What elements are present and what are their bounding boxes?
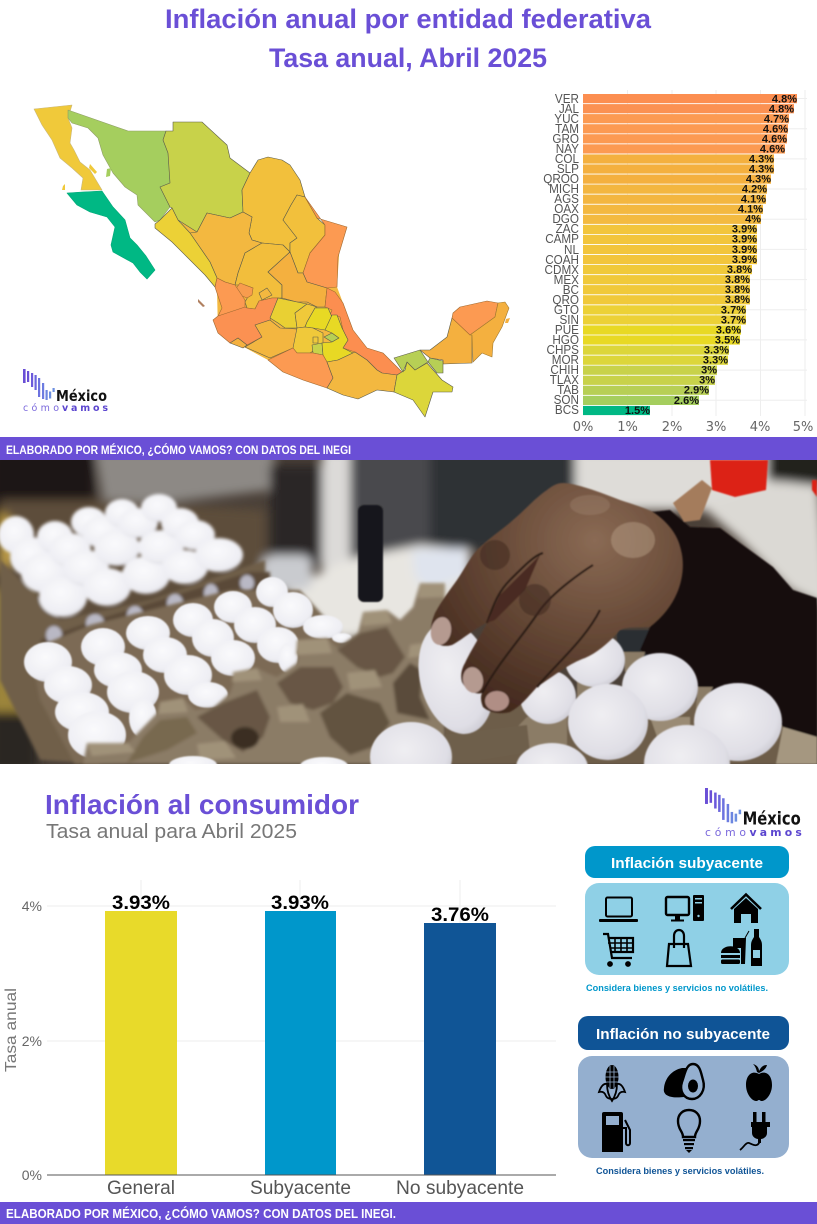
- bar chart: inflation by state: 4.2%: [742, 184, 767, 196]
- icon: shopping cart: [603, 934, 633, 966]
- icon: corn: [599, 1065, 625, 1101]
- bar chart: inflation by state: 4.3%: [749, 164, 774, 176]
- arm and red shirt behind: [673, 460, 817, 522]
- bar chart: inflation by state: TLAX: [550, 372, 579, 387]
- icon: laptop: [599, 898, 638, 922]
- bar chart: consumer inflation: No subyacente: [396, 1178, 524, 1199]
- icon: shopping bag: [667, 930, 691, 966]
- panel: inflación subyacente: Considera bienes y servicios no volátiles.: [586, 983, 768, 994]
- bar chart: consumer inflation: 0%: [22, 1167, 42, 1183]
- bar chart: inflation by state: CHIH: [550, 362, 579, 377]
- logo: México cómo vamos: cómo: [23, 403, 59, 414]
- panel: inflación no subyacente: [578, 1016, 789, 1177]
- bar chart: inflation by state: COL: [555, 152, 579, 166]
- bar chart: consumer inflation: 3.93%: [271, 893, 329, 914]
- bar chart: inflation by state: 4.8%: [769, 104, 794, 116]
- bar chart: inflation by state: 4.6%: [763, 124, 788, 136]
- icon: desktop computer: [666, 895, 704, 922]
- bar chart: inflation by state: 4.3%: [746, 174, 771, 186]
- bar chart: inflation by state: 3.9%: [732, 224, 757, 236]
- bar chart: consumer inflation: 3.76%: [431, 905, 489, 926]
- panel: inflación no subyacente: Inflación no subyacente: [596, 1026, 770, 1043]
- bar chart: inflation by state: VER: [555, 92, 579, 106]
- source band bottom: ELABORADO POR MÉXICO, ¿CÓMO VAMOS? CON DATOS DEL INEGI.: [6, 1206, 396, 1221]
- bar chart: consumer inflation: 2%: [22, 1033, 42, 1049]
- icon: plug: [740, 1112, 770, 1150]
- bar chart: inflation by state: 4.3%: [749, 154, 774, 166]
- bar chart: inflation by state: 3.7%: [721, 304, 746, 316]
- icon: food and drinks: [721, 929, 762, 966]
- middle eggs: [24, 505, 383, 759]
- photo: hand picking an egg from a carton: [0, 460, 817, 764]
- bar chart: inflation by state: 3.8%: [725, 284, 750, 296]
- bar chart: inflation by state: 0%: [573, 420, 593, 435]
- bar chart: inflation by state: 3%: [706, 420, 726, 435]
- back carton with eggs: [0, 494, 270, 764]
- bar chart: inflation by state: 3.3%: [703, 354, 728, 366]
- icon: gas pump: [602, 1112, 630, 1152]
- bar chart: inflation by state: 4%: [745, 214, 761, 226]
- bar chart: consumer inflation: Subyacente: [250, 1178, 351, 1199]
- bar chart: inflation by state: 1%: [617, 420, 638, 435]
- bar chart: inflation by state: MOR: [552, 352, 579, 367]
- bar chart: inflation by state: JAL: [559, 102, 579, 116]
- bar chart: inflation by state: YUC: [554, 112, 579, 126]
- title: [165, 4, 652, 73]
- bar chart: inflation by state: 3.8%: [725, 274, 750, 286]
- bar chart: inflation by state: 1.5%: [625, 405, 650, 417]
- heading: Inflación al consumidor: [45, 789, 359, 843]
- bar chart: inflation by state: NAY: [556, 142, 579, 156]
- bar chart: inflation by state: [543, 90, 813, 435]
- bar chart: inflation by state: 3%: [701, 364, 717, 376]
- bar chart: consumer inflation: [3, 880, 556, 1199]
- bar chart: inflation by state: TAB: [557, 382, 579, 397]
- bar chart: inflation by state: 4.1%: [738, 204, 763, 216]
- bar chart: inflation by state: 4.1%: [741, 194, 766, 206]
- bar chart: inflation by state: 3.9%: [732, 254, 757, 266]
- right carton and dark gap: [443, 510, 817, 764]
- bar chart: inflation by state: COAH: [545, 252, 579, 267]
- bar chart: inflation by state: DGO: [552, 212, 579, 226]
- icon: light bulb: [678, 1110, 700, 1153]
- bar chart: inflation by state: MICH: [549, 182, 579, 196]
- logo: México cómo vamos (right): cómo: [705, 826, 746, 839]
- bar chart: inflation by state: MEX: [554, 272, 579, 287]
- bar chart: inflation by state: 4.8%: [772, 94, 797, 106]
- bar chart: inflation by state: 3.6%: [716, 324, 741, 336]
- bar chart: inflation by state: 4.7%: [764, 114, 789, 126]
- bar chart: inflation by state: 3.9%: [732, 244, 757, 256]
- bar chart: inflation by state: 5%: [793, 420, 813, 435]
- bar chart: inflation by state: SLP: [557, 162, 579, 176]
- bar chart: inflation by state: SON: [554, 392, 579, 407]
- bar chart: inflation by state: 2%: [662, 420, 682, 435]
- bar chart: inflation by state: GTO: [554, 302, 579, 317]
- bar chart: inflation by state: 4.6%: [762, 134, 787, 146]
- logo: México cómo vamos (right): vamos: [749, 826, 802, 839]
- bar chart: inflation by state: CAMP: [545, 232, 579, 246]
- heading: Inflación al consumidor: Tasa anual para Abril 2025: [46, 821, 297, 843]
- bar chart: inflation by state: NL: [564, 242, 579, 257]
- bar chart: inflation by state: QROO: [543, 172, 579, 186]
- foreground eggs: [168, 628, 783, 764]
- bar chart: inflation by state: BC: [563, 282, 579, 297]
- bar chart: inflation by state: SIN: [560, 312, 579, 327]
- icon: avocado: [664, 1064, 704, 1099]
- bar chart: inflation by state: TAM: [555, 122, 579, 136]
- bar chart: inflation by state: 3.3%: [704, 344, 729, 356]
- logo: México cómo vamos (right): México: [743, 809, 801, 829]
- bar chart: consumer inflation: Tasa anual: [3, 988, 20, 1072]
- logo: México cómo vamos: México: [56, 387, 107, 405]
- bar chart: inflation by state: GRO: [552, 132, 579, 146]
- bar chart: inflation by state: 3.9%: [732, 234, 757, 246]
- bar chart: inflation by state: HGO: [552, 332, 579, 347]
- bar chart: inflation by state: 3.5%: [715, 334, 740, 346]
- choropleth map of Mexico: [34, 105, 510, 417]
- bar chart: inflation by state: 2.6%: [674, 395, 699, 407]
- bar chart: inflation by state: 4.6%: [760, 144, 785, 156]
- bar chart: consumer inflation: 3.93%: [112, 893, 170, 914]
- bar chart: inflation by state: ZAC: [556, 222, 579, 236]
- bar chart: inflation by state: 3.7%: [721, 314, 746, 326]
- bar chart: inflation by state: 2.9%: [684, 384, 709, 396]
- panel: inflación subyacente: [585, 846, 789, 994]
- panel: inflación subyacente: Inflación subyacente: [611, 855, 763, 872]
- logo: México cómo vamos (right): [705, 788, 802, 839]
- front carton: [83, 583, 445, 764]
- panel: inflación no subyacente: Considera bienes y servicios volátiles.: [596, 1166, 764, 1177]
- bar chart: inflation by state: 4%: [750, 420, 770, 435]
- bar chart: inflation by state: CHPS: [547, 342, 579, 357]
- heading: Inflación al consumidor: Inflación al consumidor: [45, 789, 359, 820]
- title: Tasa anual, Abril 2025: [269, 43, 547, 73]
- bar chart: inflation by state: BCS: [555, 402, 579, 417]
- bar chart: inflation by state: 3%: [699, 374, 715, 386]
- bar chart: inflation by state: 3.8%: [727, 264, 752, 276]
- hand: [428, 483, 683, 713]
- bar chart: inflation by state: 3.8%: [725, 294, 750, 306]
- source band bottom: [0, 1202, 817, 1224]
- bar chart: inflation by state: OAX: [554, 202, 579, 216]
- source band top: ELABORADO POR MÉXICO, ¿CÓMO VAMOS? CON DATOS DEL INEGI: [6, 444, 351, 457]
- logo: México cómo vamos: vamos: [62, 403, 108, 414]
- logo: México cómo vamos: [23, 369, 108, 414]
- bar chart: consumer inflation: General: [107, 1178, 175, 1199]
- icon: apple: [746, 1064, 772, 1101]
- bar chart: consumer inflation: 4%: [22, 898, 42, 914]
- title: Inflación anual por entidad federativa: [165, 4, 652, 34]
- bar chart: inflation by state: PUE: [555, 322, 579, 337]
- bar chart: inflation by state: QRO: [552, 292, 579, 307]
- icon: house: [731, 894, 761, 923]
- middle carton bed: [30, 590, 345, 764]
- bar chart: inflation by state: AGS: [554, 192, 579, 206]
- bar chart: inflation by state: CDMX: [545, 262, 579, 277]
- source band top: [0, 437, 817, 460]
